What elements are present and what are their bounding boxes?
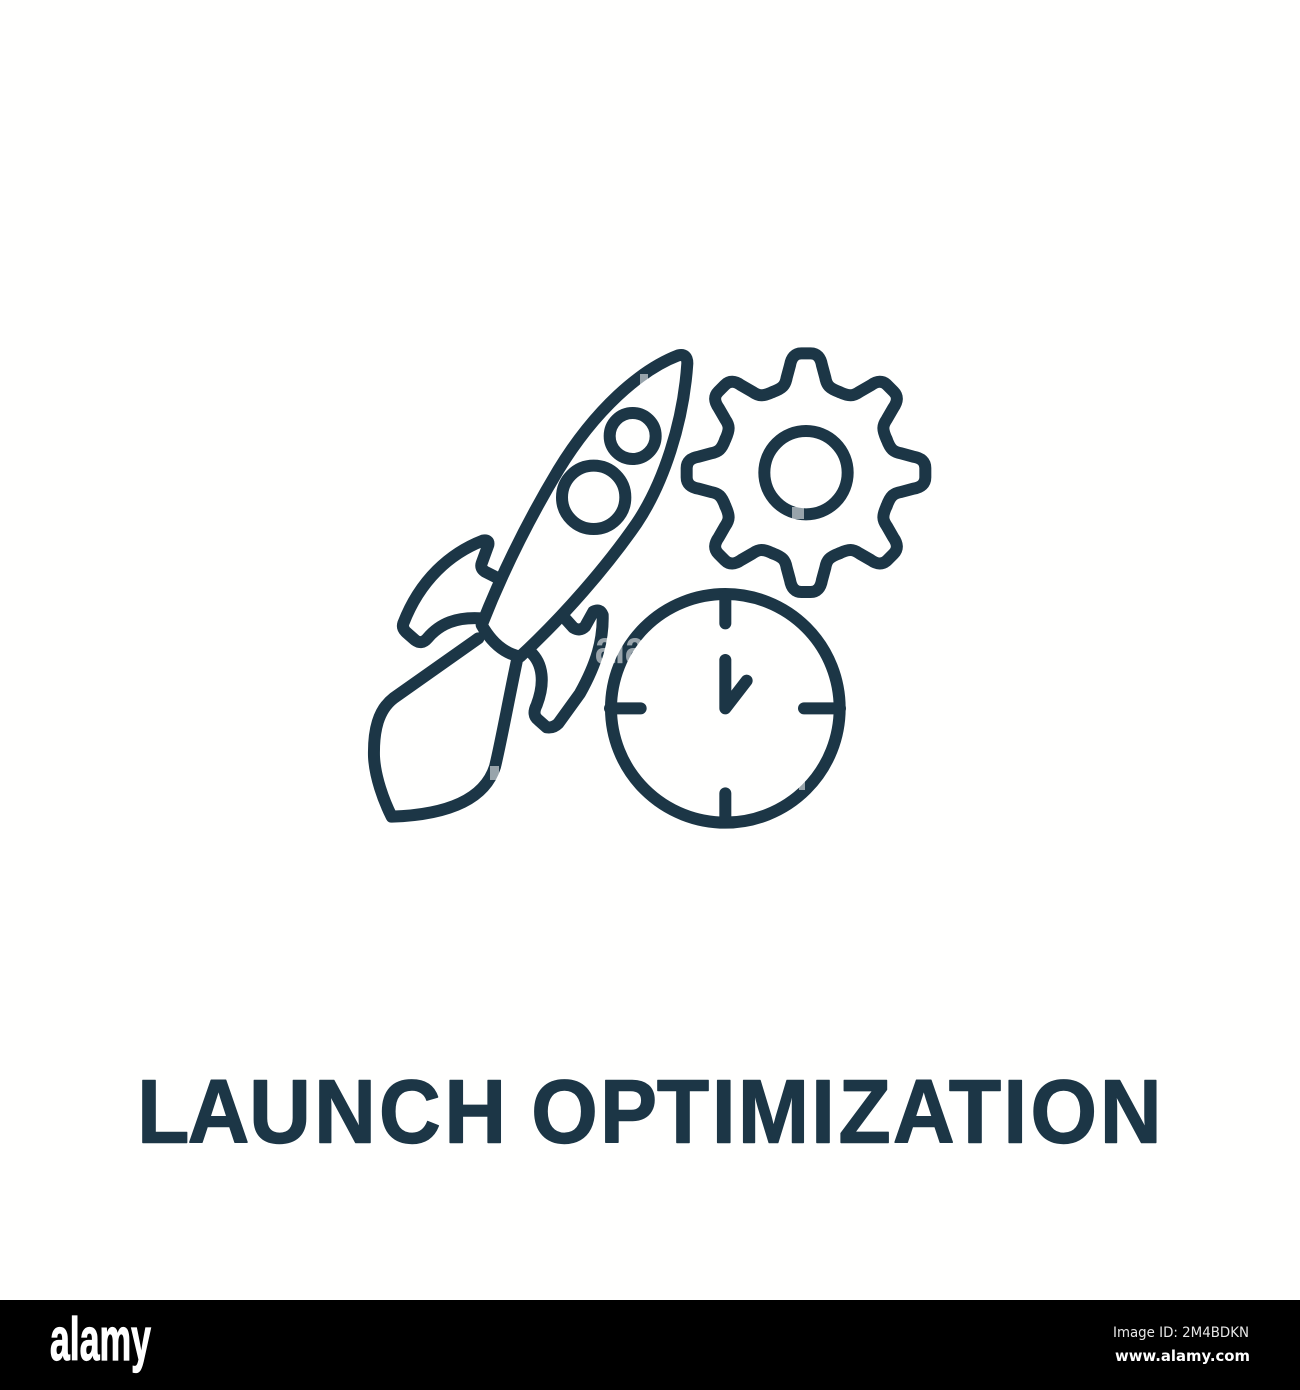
icon: clock xyxy=(610,594,840,823)
clock face xyxy=(611,594,840,823)
watermark traces xyxy=(490,374,805,790)
watermark traces: ala xyxy=(595,621,645,673)
gear teeth xyxy=(687,353,925,592)
gear hub xyxy=(764,431,848,514)
icon: launch optimization xyxy=(374,353,925,823)
rocket body xyxy=(482,355,687,657)
title: LAUNCH OPTIMIZATION xyxy=(137,1062,1162,1162)
icon: gear xyxy=(687,353,925,592)
rocket flame xyxy=(374,638,517,817)
clock ticks xyxy=(610,597,840,820)
rocket left fin xyxy=(403,540,498,642)
alamy logo: alamy xyxy=(50,1306,151,1373)
footer bar xyxy=(0,1300,1300,1390)
website: www.alamy.com xyxy=(1115,1347,1250,1365)
rocket right fin xyxy=(530,611,603,727)
rocket large window xyxy=(562,466,625,529)
image id: Image ID: 2M4BDKN xyxy=(1113,1325,1249,1341)
rocket small window xyxy=(610,413,656,459)
clock hands xyxy=(725,660,747,708)
icon: rocket xyxy=(374,355,687,817)
